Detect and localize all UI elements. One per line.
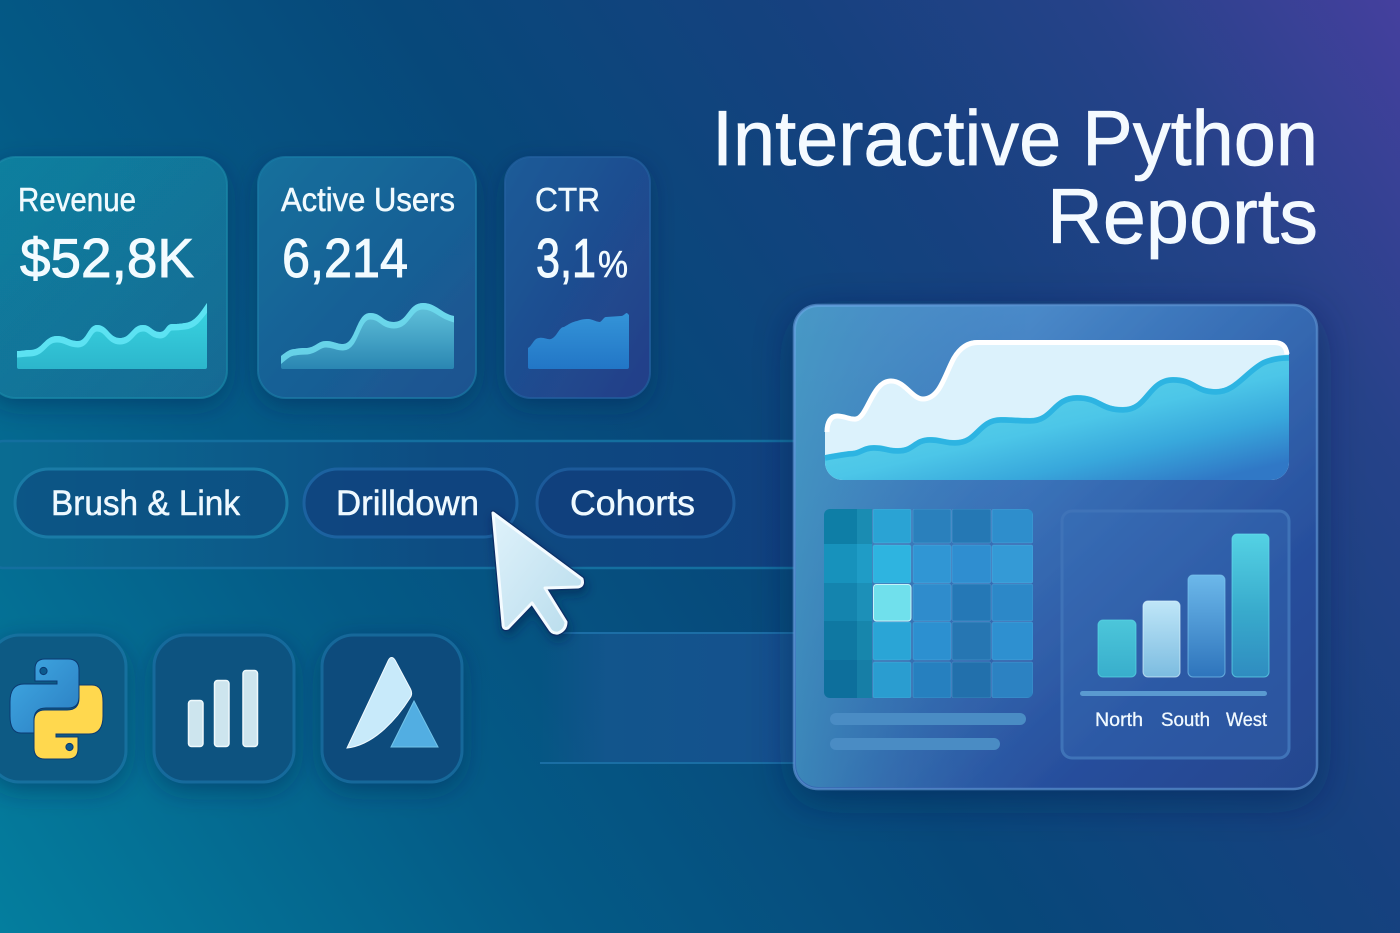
- icon: mouse cursor arrow: [493, 513, 582, 633]
- sparkline: active users: [278, 303, 457, 369]
- button: Drilldown: [304, 469, 517, 537]
- button: Brush & Link: [15, 469, 287, 537]
- value: 3,1%: 3,1: [536, 227, 596, 289]
- chart: layered area chart: [825, 340, 1289, 480]
- title: [712, 94, 1318, 260]
- chart: heatmap: [824, 509, 1033, 698]
- axis labels: North: [1095, 709, 1143, 731]
- panel: interaction toolbar: [0, 441, 818, 568]
- icon: Altair tile: [322, 635, 462, 782]
- bar: second region: [1143, 601, 1180, 677]
- panel: regional bar chart: [1062, 511, 1289, 758]
- placeholder text lines: [830, 713, 1026, 750]
- panel: Active Users KPI card: [258, 157, 476, 398]
- sparkline: revenue: [14, 303, 210, 369]
- sparkline: CTR: [528, 313, 629, 369]
- button: Cohorts: Cohorts: [570, 484, 695, 523]
- panel: lower connector band: [540, 633, 810, 764]
- button: Drilldown: Drilldown: [336, 484, 479, 523]
- label: CTR: CTR: [535, 181, 600, 218]
- bar: fourth region: [1232, 534, 1269, 677]
- icon: bar chart tile: [154, 635, 294, 782]
- icon: Altair logo: [347, 658, 438, 748]
- axis line: [1080, 691, 1267, 696]
- label: Active Users: Active Users: [281, 181, 455, 218]
- icon: Python tile: [0, 635, 126, 782]
- title: Reports: [1047, 172, 1318, 260]
- icon: Python logo: [10, 659, 103, 759]
- icon: three bars: [188, 670, 258, 746]
- panel: Revenue KPI card: [0, 157, 227, 398]
- label: Revenue: Revenue: [18, 181, 136, 218]
- title: Interactive Python: [712, 94, 1318, 182]
- bar: third region: [1188, 575, 1225, 677]
- value: $52,8K: $52,8K: [20, 227, 194, 289]
- axis labels: South: [1161, 709, 1210, 731]
- value: 6,214: 6,214: [282, 227, 408, 289]
- value: 3,1%: %: [598, 244, 628, 286]
- axis labels: [1095, 709, 1268, 731]
- bar: first region: [1098, 620, 1136, 677]
- panel: dashboard window: [794, 305, 1317, 789]
- button: Cohorts: [537, 469, 734, 537]
- panel: CTR KPI card: [505, 157, 650, 398]
- button: Brush & Link: Brush & Link: [51, 484, 240, 523]
- axis labels: West: [1226, 709, 1268, 731]
